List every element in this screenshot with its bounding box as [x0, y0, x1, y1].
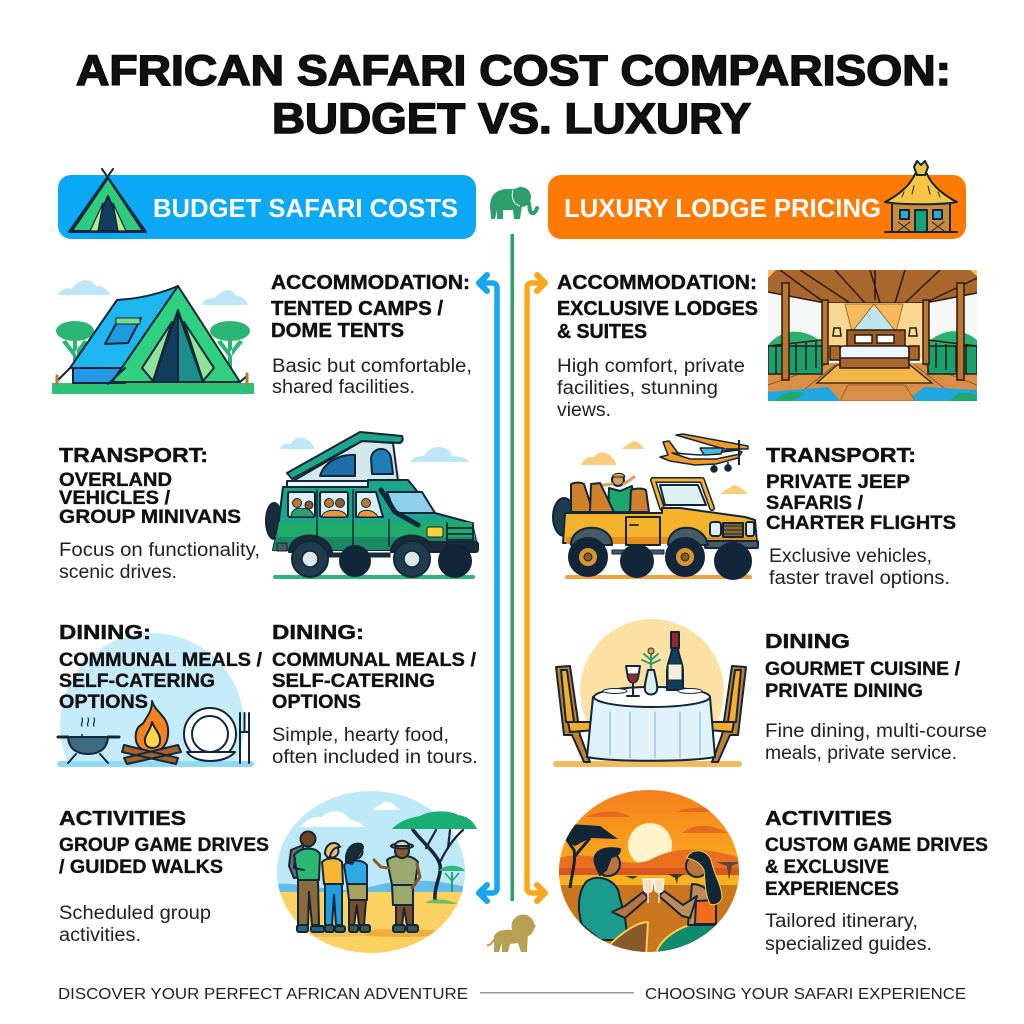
text: budget accommodation: TENTED CAMPS / — [271, 298, 443, 320]
text: budget activities: GROUP GAME DRIVES — [59, 835, 269, 856]
text: luxury dining: PRIVATE DINING — [765, 681, 923, 702]
panel: budget dining — [56, 624, 476, 767]
text: budget dining detail: DINING: — [272, 622, 364, 644]
title: AFRICAN SAFARI COST COMPARISON: — [76, 47, 951, 95]
panel: luxury accommodation — [557, 270, 977, 421]
panel: luxury activities — [559, 790, 988, 958]
arrow: luxury connector — [527, 275, 545, 901]
text: budget dining detail: Simple, hearty food, — [272, 725, 449, 746]
text: luxury dining: Fine dining, multi-course — [765, 721, 987, 742]
illustration: guided group walk — [277, 790, 477, 954]
text: budget dining heading: SELF-CATERING — [59, 671, 215, 692]
text: luxury accommodation — [557, 272, 758, 421]
text: luxury activities: CUSTOM GAME DRIVES — [765, 835, 988, 856]
text: budget transport — [59, 445, 260, 583]
footer: CHOOSING YOUR SAFARI EXPERIENCE — [645, 986, 966, 1003]
icon: lion — [487, 914, 536, 952]
text: budget transport: OVERLAND — [59, 470, 172, 491]
text: budget accommodation — [271, 272, 472, 398]
text: budget dining detail: often included in tours. — [272, 747, 478, 768]
text: luxury activities: ACTIVITIES — [765, 808, 892, 830]
illustration: lodge suite — [768, 270, 977, 401]
text: luxury activities: specialized guides. — [765, 934, 932, 955]
arrow: budget connector — [479, 275, 497, 901]
text: budget dining detail: OPTIONS — [272, 692, 361, 713]
text: budget accommodation: shared facilities. — [272, 377, 415, 398]
banner: budget safari costs — [58, 169, 476, 239]
text: luxury transport: PRIVATE JEEP — [766, 472, 910, 493]
text: budget dining heading — [59, 622, 263, 713]
text: luxury activities: & EXCLUSIVE — [765, 857, 889, 878]
banner: luxury lodge pricing: LUXURY LODGE PRICING — [564, 193, 881, 223]
text: luxury transport: faster travel options. — [769, 568, 950, 589]
text: luxury dining: DINING — [765, 631, 850, 653]
illustration: camp cooking — [56, 633, 254, 767]
text: luxury accommodation: EXCLUSIVE LODGES — [557, 298, 758, 320]
footer — [58, 986, 966, 1003]
text: luxury transport: TRANSPORT: — [766, 445, 916, 467]
text: luxury dining: GOURMET CUISINE / — [765, 659, 961, 680]
icon: banner tent — [69, 169, 146, 232]
text: luxury accommodation: ACCOMMODATION: — [557, 272, 757, 294]
text: budget dining detail — [272, 622, 478, 768]
text: budget transport: scenic drives. — [59, 562, 177, 583]
text: luxury transport — [766, 445, 956, 589]
icon: elephant — [490, 187, 537, 219]
text: luxury activities — [765, 808, 988, 955]
text: luxury transport: CHARTER FLIGHTS — [766, 513, 956, 534]
panel: budget activities — [59, 790, 477, 954]
icon: tent — [52, 280, 254, 394]
footer: DISCOVER YOUR PERFECT AFRICAN ADVENTURE — [58, 986, 468, 1003]
panel: luxury dining — [553, 619, 987, 767]
text: budget dining heading: OPTIONS — [59, 692, 148, 713]
text: luxury transport: SAFARIS / — [766, 493, 864, 514]
text: budget activities: ACTIVITIES — [59, 808, 186, 830]
text: budget transport: TRANSPORT: — [59, 445, 208, 467]
illustration: private jeep and charter plane — [553, 434, 758, 579]
banner: luxury lodge pricing — [548, 161, 966, 239]
text: budget activities: / GUIDED WALKS — [59, 857, 223, 878]
title — [76, 47, 951, 143]
text: luxury activities: Tailored itinerary, — [765, 911, 918, 932]
text: luxury accommodation: views. — [557, 400, 611, 421]
panel: budget accommodation — [52, 272, 472, 398]
illustration: sunset toast — [559, 790, 741, 958]
text: budget transport: Focus on functionality, — [59, 540, 260, 561]
text: budget transport: VEHICLES / — [59, 488, 171, 509]
text: luxury dining: meals, private service. — [765, 743, 957, 764]
text: luxury activities: EXPERIENCES — [765, 879, 899, 900]
text: budget accommodation: Basic but comfortable, — [272, 356, 472, 377]
text: luxury transport: Exclusive vehicles, — [769, 546, 932, 567]
text: budget activities: activities. — [59, 925, 141, 946]
panel: budget transport — [59, 432, 482, 583]
text: budget transport: GROUP MINIVANS — [59, 507, 241, 528]
title: BUDGET VS. LUXURY — [272, 95, 751, 143]
text: budget activities — [59, 808, 269, 946]
connector: centre line — [510, 234, 514, 901]
text: luxury accommodation: & SUITES — [557, 321, 647, 343]
text: budget accommodation: ACCOMMODATION: — [271, 272, 470, 294]
text: budget dining heading: DINING: — [59, 622, 151, 644]
illustration: fine dining table — [553, 619, 746, 767]
illustration: overland vehicle — [266, 432, 482, 579]
icon: banner hut — [885, 161, 957, 232]
text: budget dining detail: SELF-CATERING — [272, 671, 435, 692]
banner: budget safari costs: BUDGET SAFARI COSTS — [153, 193, 458, 223]
text: luxury accommodation: facilities, stunning — [557, 378, 718, 399]
text: luxury dining — [765, 631, 987, 764]
text: luxury accommodation: High comfort, private — [557, 356, 745, 377]
text: budget dining detail: COMMUNAL MEALS / — [272, 650, 477, 671]
panel: luxury transport — [553, 434, 956, 589]
text: budget activities: Scheduled group — [59, 903, 211, 924]
text: budget dining heading: COMMUNAL MEALS / — [59, 650, 263, 671]
text: budget accommodation: DOME TENTS — [271, 320, 404, 342]
